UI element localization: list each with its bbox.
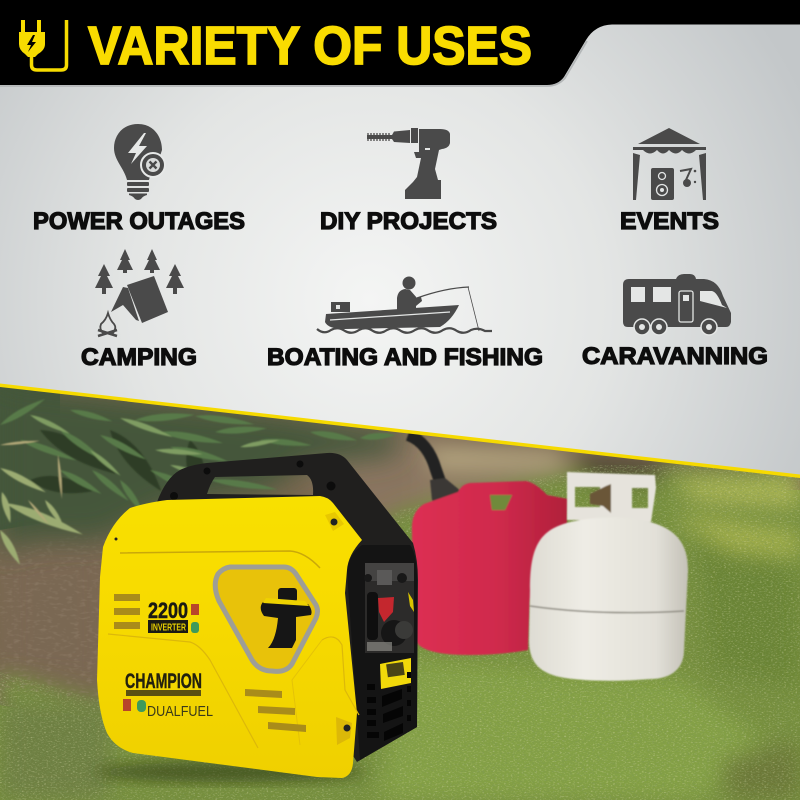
generator badge: 2200 inverter [148, 598, 199, 634]
generator vent slots [114, 594, 306, 732]
generator badge: 2200 inverter: 2200 [148, 598, 188, 623]
icon: fishing boat [317, 276, 492, 333]
generator control panel [364, 563, 414, 653]
generator logo: dual fuel: DUALFUEL [147, 703, 213, 720]
label: DIY projects: DIY PROJECTS [320, 208, 497, 235]
icon: canopy tent with speaker [633, 128, 706, 200]
generator pull-start window [215, 567, 318, 671]
generator yellow label [380, 658, 411, 689]
use: boating and fishing [267, 276, 543, 371]
icon: tent, trees and campfire [95, 249, 184, 336]
use: camping [81, 249, 197, 371]
label: events: EVENTS [620, 208, 719, 235]
generator side vents [367, 672, 411, 741]
photo background: yard scene [0, 380, 800, 800]
generator badge: 2200 inverter: INVERTER [151, 622, 187, 634]
generator logo: dual fuel [123, 699, 213, 720]
lawn underlay [0, 490, 800, 800]
title: VARIETY OF USES [88, 16, 532, 76]
use: caravanning [582, 274, 768, 370]
icon: plug [19, 20, 66, 70]
generator logo: Champion [125, 670, 202, 696]
propane tank [529, 472, 688, 681]
grey panel [0, 0, 800, 478]
use: power outages [33, 124, 245, 235]
generator [95, 453, 418, 782]
generator handle and black housing [157, 453, 418, 762]
icon: drill [367, 128, 450, 199]
label: power outages: POWER OUTAGES [33, 208, 245, 235]
label: camping: CAMPING [81, 344, 197, 371]
icon: light bulb [114, 124, 165, 200]
foliage [0, 384, 400, 566]
fuel can [408, 435, 568, 655]
header banner [0, 0, 800, 86]
generator yellow shell [97, 496, 362, 778]
label: boating and fishing: BOATING AND FISHING [267, 344, 543, 371]
icon: motorhome [623, 274, 731, 335]
use: DIY projects [320, 128, 497, 235]
lawn [0, 452, 800, 800]
generator logo: Champion: CHAMPION [125, 670, 202, 693]
label: caravanning: CARAVANNING [582, 343, 768, 370]
use: events [620, 128, 719, 235]
